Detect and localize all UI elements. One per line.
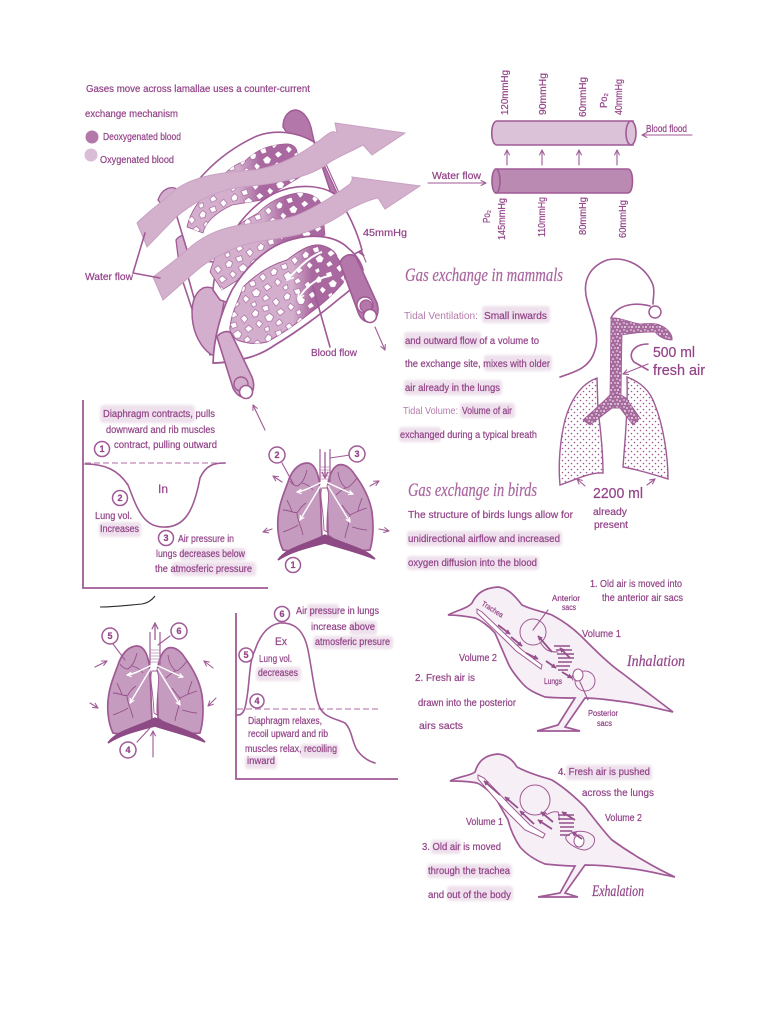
panel: exhalation graph <box>236 604 398 779</box>
labels: gill diagram: Blood flow <box>311 348 358 359</box>
legend: blood types: Deoxygenated blood <box>103 132 181 143</box>
labels: exhalation: Exhalation <box>591 883 644 900</box>
bird: inhalation: Lungs <box>544 677 562 686</box>
legend: blood types: Oxygenated blood <box>100 155 174 166</box>
panel: exhalation graph: 5 <box>243 650 249 660</box>
panel: exhalation graph: muscles relax, recoiling <box>245 744 337 755</box>
counter-current tube diagram: 60mmHg <box>618 200 629 238</box>
lungs: inhalation: 2 <box>274 450 280 460</box>
lungs: exhalation <box>90 623 216 758</box>
counter-current tube diagram: 110mmHg <box>537 197 548 237</box>
section: gas exchange in mammals: Tidal Ventilation: <box>404 311 478 322</box>
section: gas exchange in birds: oxygen diffusion into the blood <box>408 558 537 569</box>
panel: exhalation graph: Ex <box>275 636 287 648</box>
section: gas exchange in birds: The structure of birds lungs allow for <box>408 510 574 521</box>
section: gas exchange in birds <box>407 480 574 570</box>
counter-current tube diagram: Po₂ <box>482 210 493 223</box>
section: gas exchange in mammals: Small inwards <box>484 311 547 322</box>
panel: exhalation graph: 6 <box>279 609 285 619</box>
panel: inhalation graph: downward and rib muscles <box>106 425 215 436</box>
counter-current tube diagram: 80mmHg <box>578 197 589 235</box>
section: gas exchange in mammals: Tidal Volume: <box>403 406 458 417</box>
labels: exhalation: 3. Old air is moved <box>422 842 501 853</box>
respiratory tract diagram: present <box>594 520 628 531</box>
section: gas exchange in mammals: the exchange site, mixes with older <box>405 359 551 370</box>
lungs: inhalation: 1 <box>290 560 296 570</box>
section: gas exchange in mammals: air already in the lungs <box>405 383 500 394</box>
lungs: inhalation <box>253 405 389 572</box>
labels: exhalation: Volume 2 <box>605 813 642 824</box>
counter-current tube diagram: Blood flood <box>646 124 687 135</box>
bird: inhalation: Trachea <box>480 599 506 620</box>
section: gas exchange in mammals <box>399 265 563 442</box>
black pen stroke <box>100 596 155 607</box>
bird: inhalation: sacs <box>562 603 576 612</box>
counter-current tube diagram: 90mmHg <box>538 73 549 115</box>
bird: inhalation: Anterior <box>552 594 580 603</box>
counter-current tube diagram: 145mmHg <box>497 198 508 240</box>
labels: exhalation: 4. Fresh air is pushed <box>558 767 650 778</box>
section: gas exchange in mammals: Volume of air <box>462 406 513 417</box>
water flow arrow, lower <box>153 177 420 300</box>
gill lamellae diagram <box>133 110 420 398</box>
back tube, deoxygenated <box>340 255 378 322</box>
section: gas exchange in mammals: and outward flow of a volume to <box>405 336 539 347</box>
respiratory tract diagram: fresh air <box>653 362 705 379</box>
bird: inhalation: Posterior <box>588 709 618 718</box>
labels: exhalation: across the lungs <box>582 788 654 799</box>
panel: inhalation graph: 2 <box>117 493 123 503</box>
heading: birds: Gas exchange in birds <box>408 480 537 501</box>
panel: exhalation graph: atmosferic presure <box>315 637 390 648</box>
water flow arrow, upper <box>137 123 405 247</box>
labels: gill diagram <box>85 228 407 359</box>
panel: exhalation graph: Lung vol. <box>259 654 292 665</box>
lungs: exhalation: 6 <box>176 626 182 636</box>
panel: exhalation graph: Diaphragm relaxes, <box>248 716 322 727</box>
panel: inhalation graph <box>83 400 268 588</box>
labels: inhalation: Volume 1 <box>582 629 621 640</box>
panel: exhalation graph: recoil upward and rib <box>248 729 328 740</box>
labels: inhalation <box>415 579 685 732</box>
counter-current tube diagram: 60mmHg <box>578 77 589 117</box>
panel: exhalation graph: decreases <box>258 668 298 679</box>
heading: counter-current exchange: Gases move across lamallae uses a counter-current <box>86 84 310 95</box>
panel: inhalation graph: Diaphragm contracts, pulls <box>103 409 215 420</box>
labels: inhalation: 2. Fresh air is <box>415 673 475 684</box>
panel: inhalation graph: In <box>158 482 168 496</box>
labels: exhalation: through the trachea <box>428 866 510 877</box>
labels: inhalation: the anterior air sacs <box>602 593 683 604</box>
labels: inhalation: 1. Old air is moved into <box>590 579 682 590</box>
panel: exhalation graph: increase above <box>311 622 375 633</box>
labels: inhalation: Volume 2 <box>459 653 497 664</box>
labels: inhalation: airs sacts <box>419 721 463 732</box>
counter-current tube diagram: Water flow <box>432 171 482 182</box>
bird: inhalation <box>448 587 673 731</box>
heading: mammals: Gas exchange in mammals <box>405 265 563 286</box>
labels: exhalation: and out of the body <box>428 890 511 901</box>
labels: inhalation: drawn into the posterior <box>418 698 517 709</box>
panel: inhalation graph: 3 <box>163 533 169 543</box>
respiratory tract diagram: 500 ml <box>653 344 695 361</box>
respiratory tract diagram: already <box>593 507 627 518</box>
heading: counter-current exchange <box>85 84 310 120</box>
bird: inhalation: sacs <box>597 719 612 728</box>
panel: exhalation graph: Air pressure in lungs <box>296 606 379 617</box>
labels: exhalation: Volume 1 <box>466 817 503 828</box>
panel: exhalation graph: inward <box>247 756 275 767</box>
panel: inhalation graph: Air pressure in <box>178 534 234 545</box>
front tube, oxygenated <box>217 332 254 397</box>
panel: inhalation graph: lungs decreases below <box>156 549 246 560</box>
labels: exhalation <box>422 765 654 901</box>
heading: counter-current exchange: exchange mechanism <box>85 109 178 120</box>
bird: exhalation <box>450 754 675 897</box>
labels: gill diagram: 45mmHg <box>363 228 407 239</box>
panel: exhalation graph: 4 <box>254 696 260 706</box>
panel: inhalation graph: the atmosferic pressure <box>155 564 252 575</box>
respiratory tract diagram: 2200 ml <box>593 485 643 502</box>
legend: blood types <box>84 130 181 166</box>
section: gas exchange in birds: unidirectional airflow and increased <box>408 534 560 545</box>
lungs: exhalation: 5 <box>107 631 113 641</box>
counter-current tube diagram: Po₂ <box>599 93 610 108</box>
panel: inhalation graph: Lung vol. <box>95 511 132 522</box>
labels: gill diagram: Water flow <box>85 272 134 283</box>
lungs: exhalation: 4 <box>125 745 131 755</box>
lungs: inhalation: 3 <box>354 449 360 459</box>
panel: inhalation graph: Increases <box>100 524 139 535</box>
counter-current tube diagram <box>428 70 692 240</box>
counter-current tube diagram: 40mmHg <box>614 79 625 115</box>
respiratory tract diagram <box>559 259 705 531</box>
section: gas exchange in mammals: exchanged during a typical breath <box>400 430 537 441</box>
counter-current tube diagram: 120mmHg <box>500 70 511 115</box>
panel: inhalation graph: 1 <box>99 444 105 454</box>
panel: inhalation graph: contract, pulling outward <box>114 440 217 451</box>
labels: inhalation: Inhalation <box>626 653 685 670</box>
